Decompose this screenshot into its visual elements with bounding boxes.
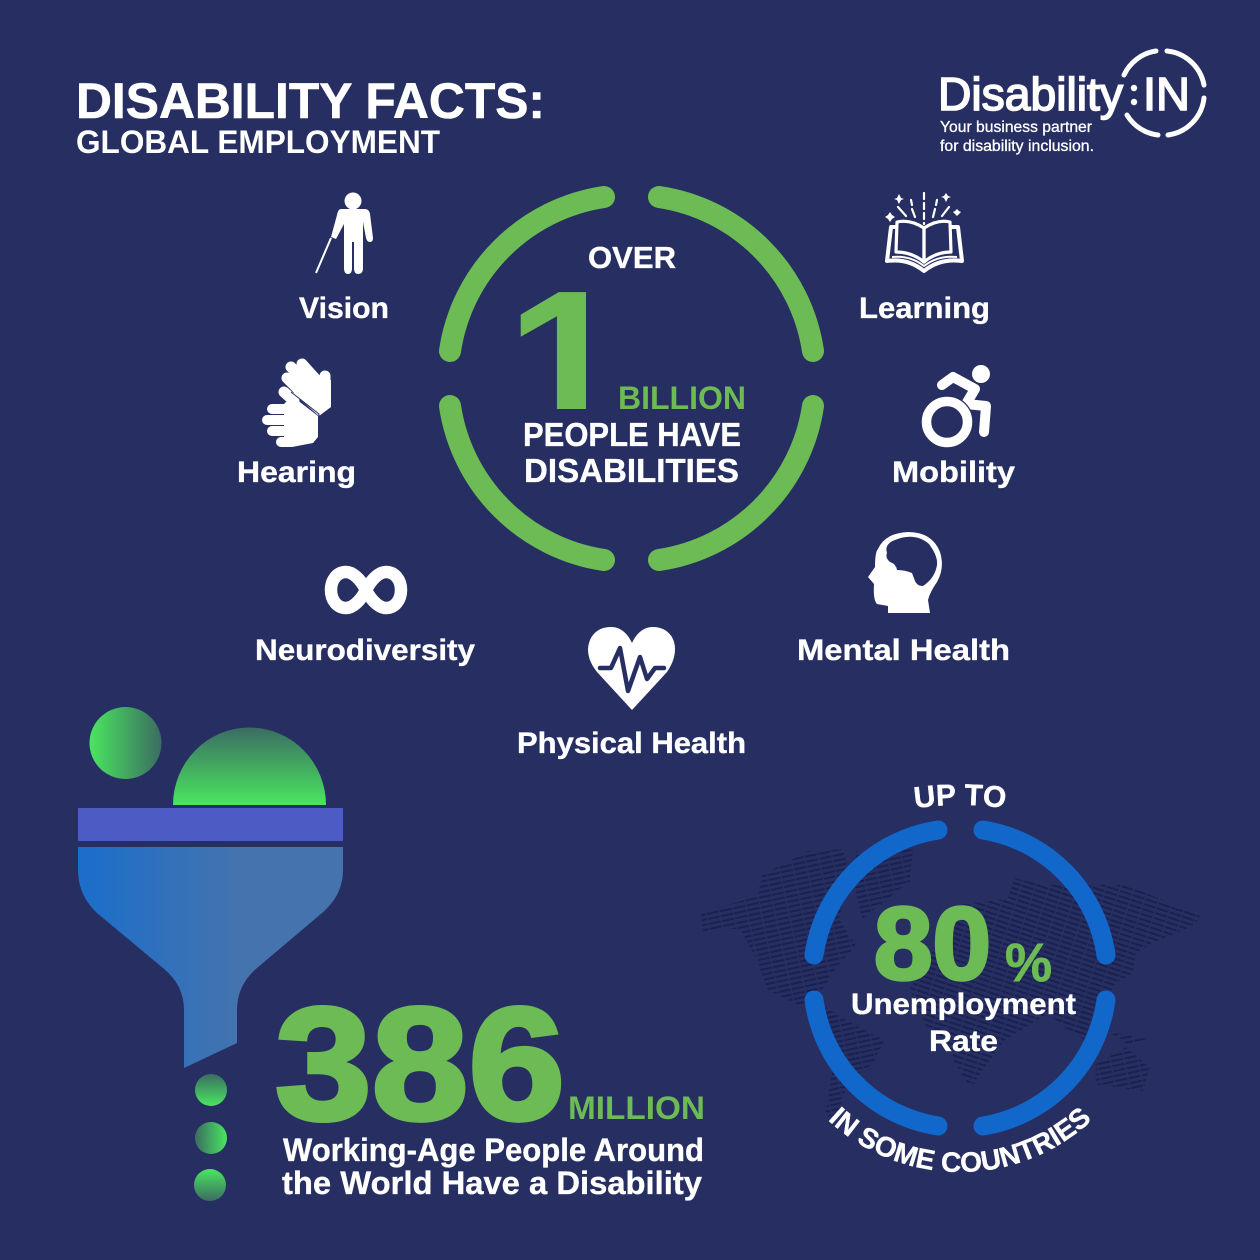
title: GLOBAL EMPLOYMENT bbox=[76, 124, 440, 160]
label: vision: Vision bbox=[299, 292, 389, 325]
label: mobility: Mobility bbox=[892, 456, 1015, 489]
icon: mental health head bbox=[868, 532, 942, 613]
unemployment stat: Rate bbox=[929, 1025, 998, 1058]
one billion stat: 1 bbox=[506, 250, 628, 473]
world map bbox=[700, 849, 1200, 1118]
one billion stat: OVER bbox=[588, 240, 676, 275]
one billion stat bbox=[520, 246, 744, 482]
386 million stat bbox=[275, 974, 705, 1201]
one billion stat: DISABILITIES bbox=[524, 452, 739, 489]
logo: Disability:IN: Disability bbox=[938, 68, 1123, 120]
unemployment stat bbox=[851, 886, 1076, 1058]
icon: mobility wheelchair bbox=[926, 365, 990, 442]
green ring bbox=[450, 197, 813, 560]
logo: Disability:IN: for disability inclusion. bbox=[940, 138, 1094, 155]
unemployment stat: % bbox=[1005, 933, 1052, 993]
title: DISABILITY FACTS: bbox=[76, 73, 545, 129]
one billion stat: PEOPLE HAVE bbox=[523, 416, 741, 453]
curved text: up to: UP TO bbox=[914, 784, 1006, 808]
funnel graphic bbox=[78, 707, 343, 1201]
386 million stat: Working-Age People Around bbox=[283, 1132, 704, 1168]
icon: vision bbox=[316, 192, 373, 274]
label: neurodiversity: Neurodiversity bbox=[255, 634, 475, 667]
icon: learning book bbox=[885, 193, 962, 271]
blue ring bbox=[814, 830, 1106, 1126]
one billion stat: BILLION bbox=[618, 380, 746, 416]
label: learning: Learning bbox=[859, 292, 990, 325]
label: physical health: Physical Health bbox=[517, 727, 746, 760]
unemployment stat: 80 bbox=[874, 886, 991, 1001]
logo: Disability:IN bbox=[938, 51, 1204, 155]
unemployment stat: Unemployment bbox=[851, 988, 1076, 1021]
icon: neurodiversity infinity bbox=[331, 572, 401, 608]
curved text: in some countries: IN SOME COUNTRIES bbox=[828, 1106, 1090, 1172]
label: hearing: Hearing bbox=[237, 456, 356, 489]
386 million stat: MILLION bbox=[568, 1090, 705, 1126]
logo: Disability:IN: Your business partner bbox=[940, 119, 1093, 136]
icon: physical health heart bbox=[588, 627, 675, 710]
logo: Disability:IN: IN bbox=[1143, 68, 1190, 120]
386 million stat: 386 bbox=[275, 974, 565, 1153]
386 million stat: the World Have a Disability bbox=[282, 1165, 702, 1201]
icon: hearing hands bbox=[267, 364, 331, 447]
label: mental health: Mental Health bbox=[797, 634, 1010, 667]
title bbox=[76, 73, 545, 160]
